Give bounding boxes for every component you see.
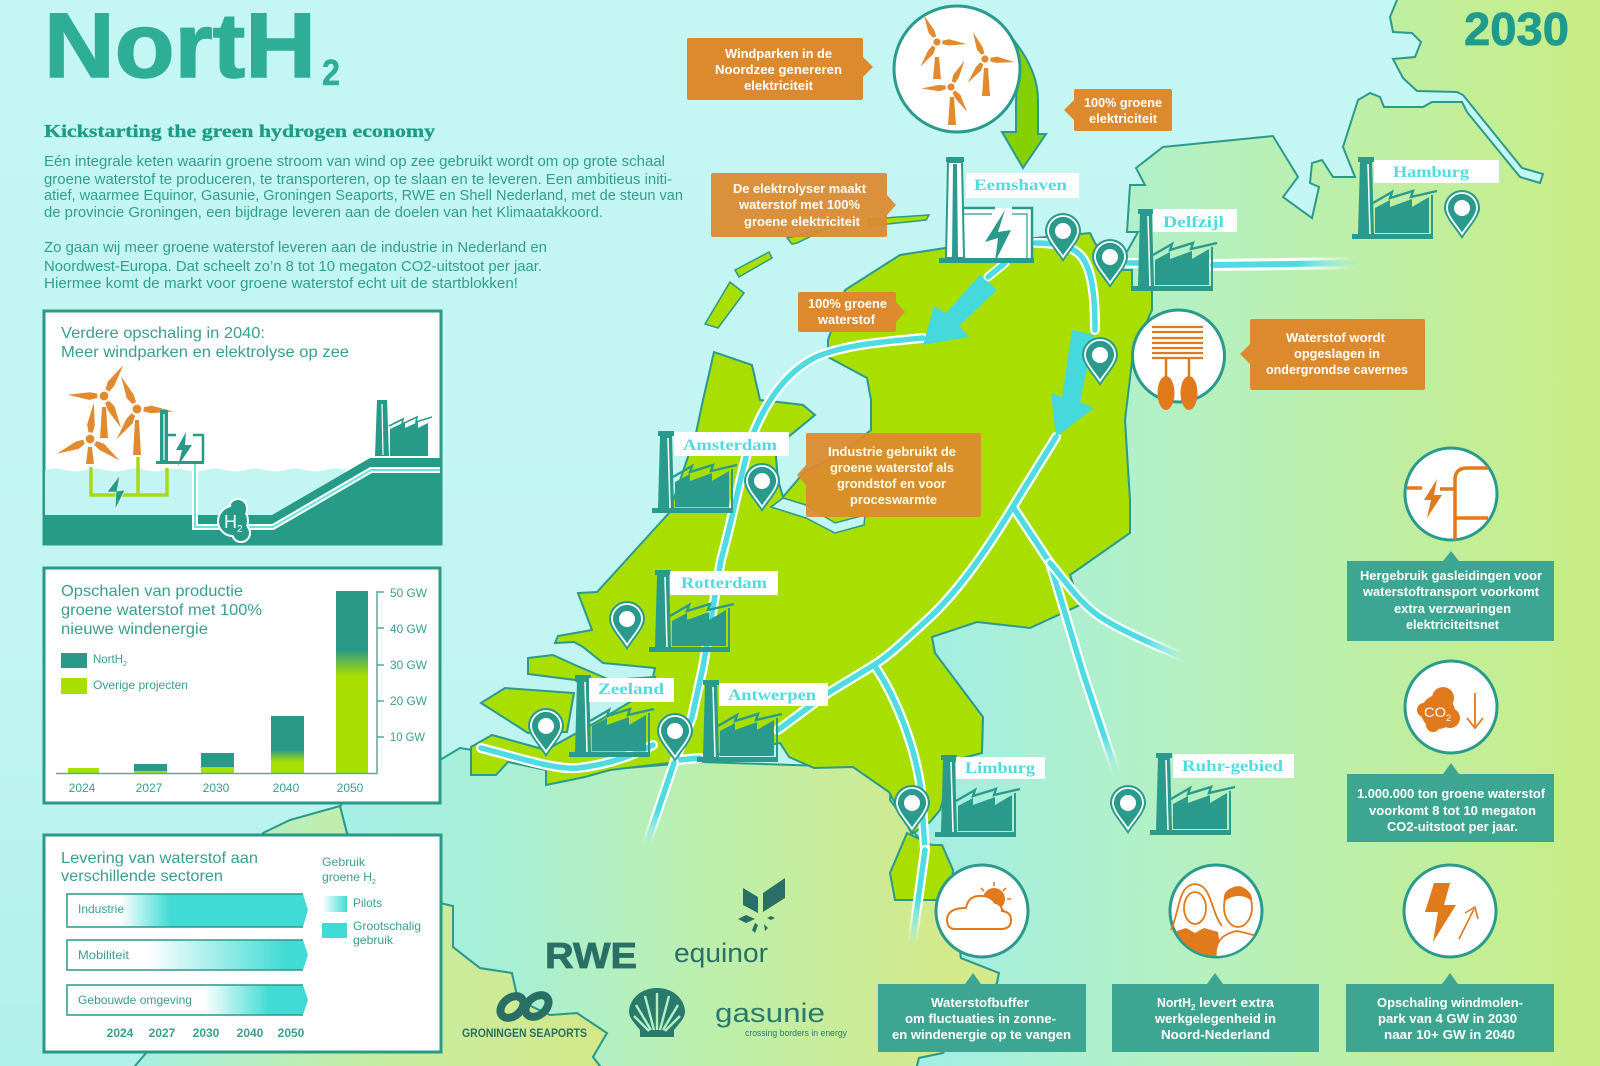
callout: cavernes: Waterstof wordt: [1286, 330, 1386, 345]
panel heading: Meer windparken en elektrolyse op zee: [61, 344, 349, 361]
logo: RWE: RWE: [545, 935, 637, 976]
icon: big wind turbine circle: [894, 3, 1020, 132]
callout: industrie: groene waterstof als: [830, 460, 954, 475]
icon: people: [1165, 865, 1264, 960]
info box: werkgelegenheid: Noord-Nederland: [1161, 1027, 1270, 1042]
panel heading: Levering van waterstof aan: [61, 850, 258, 867]
bar chart: 40 GW: [390, 622, 428, 636]
callout: groene waterstof: 100% groene: [808, 296, 887, 311]
legend: NortH: [93, 652, 123, 666]
callout: cavernes: ondergrondse cavernes: [1266, 362, 1408, 377]
icon: gas pipeline reuse: [1405, 448, 1497, 540]
callout: groene elektriciteit: 100% groene: [1084, 95, 1162, 110]
factory: Eemshaven electrolyser: [939, 157, 1079, 263]
info box: werkgelegenheid: 2: [1191, 1003, 1196, 1012]
logo: Groningen Seaports: [462, 991, 587, 1040]
info box: gasleidingen: extra verzwaringen: [1394, 601, 1511, 616]
sector bars: Industrie: [78, 902, 124, 916]
title: 2: [322, 52, 340, 93]
pipeline: [195, 463, 440, 527]
logo: Gasunie: crossing borders in energy: [745, 1028, 847, 1038]
logo: equinor: [674, 878, 785, 968]
info box: werkgelegenheid: NortH: [1157, 995, 1191, 1010]
Limburg tail: [890, 833, 953, 900]
H2 molecule: H: [224, 512, 237, 532]
factory: Hamburg: [1352, 157, 1499, 239]
H2 molecule: [218, 499, 250, 542]
info box: gasleidingen: Hergebruik gasleidingen voor: [1360, 568, 1542, 583]
panel heading: nieuwe windenergie: [61, 621, 208, 638]
land: Germany and Denmark: [890, 0, 1600, 1066]
arrow: hydrogen south: [1051, 330, 1094, 437]
legend: gebruik: [353, 933, 394, 947]
bar chart: 50 GW: [390, 586, 428, 600]
icon: bolt with arrow: [1404, 865, 1496, 957]
info box: opschaling windmolenpark: [1346, 973, 1554, 1052]
logo: Shell: [629, 988, 685, 1037]
legend: 2: [123, 661, 127, 668]
H2 molecule: 2: [237, 524, 243, 535]
callout: elektrolyser: waterstof met 100%: [738, 197, 860, 212]
panel heading: [61, 850, 258, 885]
factory: Zeeland: [569, 675, 674, 757]
turbines: [55, 348, 177, 464]
hydrogen pipelines: [481, 243, 1357, 945]
logo: Groningen Seaports: GRONINGEN SEAPORTS: [462, 1026, 587, 1040]
factory: Rotterdam: Rotterdam: [681, 575, 768, 592]
year 2030: 2030: [1464, 3, 1569, 55]
timeline years: 2050: [278, 1026, 305, 1040]
icon: CO2 reduction: [1405, 661, 1497, 753]
callout: industrie: proceswarmte: [850, 492, 937, 507]
intro text: Eén integrale keten waarin groene stroom van wind op zee gebruikt wordt om op grote schaal: [44, 154, 665, 170]
callout: cavernes: opgeslagen in: [1294, 346, 1380, 361]
factory: Limburg: [935, 755, 1045, 837]
logo: Gasunie: gasunie: [715, 998, 825, 1028]
intro text: atief, waarmee Equinor, Gasunie, Groningen Seaports, RWE en Shell Nederland, met de steun van: [44, 188, 683, 204]
timeline years: 2024: [107, 1026, 134, 1040]
callout: groene waterstof: [798, 292, 905, 332]
info box: CO2: voorkomt 8 tot 10 megaton: [1369, 803, 1536, 818]
icon: bolt: [107, 475, 125, 510]
bar chart: [56, 586, 428, 795]
sector bars: Gebouwde omgeving: [78, 993, 192, 1007]
info box: opschaling windmolenpark: park van 4 GW in 2030: [1378, 1011, 1517, 1026]
info box: waterstofbuffer: [878, 973, 1086, 1052]
info box: werkgelegenheid: werkgelegenheid in: [1154, 1011, 1276, 1026]
factory: Delfzijl: Delfzijl: [1163, 214, 1225, 231]
info box: opschaling windmolenpark: Opschaling windmolen-: [1377, 995, 1523, 1010]
logo: Gasunie: [715, 998, 847, 1038]
timeline years: 2040: [237, 1026, 264, 1040]
land: France: [135, 806, 607, 1066]
intro text: Hiermee komt de markt voor groene waterstof echt uit de startblokken!: [44, 276, 518, 292]
callout: industrie: grondstof en voor: [837, 476, 946, 491]
legend: [322, 855, 421, 947]
timeline years: 2030: [193, 1026, 220, 1040]
intro text: de provincie Groningen, een bijdrage leveren aan de doelen van het Klimaatakkoord.: [44, 205, 603, 221]
water: [45, 468, 345, 516]
Wadden islands: [705, 215, 929, 328]
sector bars: Mobiliteit: [78, 948, 130, 962]
legend: groene H: [322, 870, 372, 884]
logo: equinor: equinor: [674, 938, 768, 968]
factory: Zeeland: Zeeland: [598, 681, 664, 698]
seabed and land: [45, 458, 440, 543]
callout: groene waterstof: waterstof: [817, 312, 876, 327]
panel heading: Verdere opschaling in 2040:: [61, 325, 265, 342]
info box: waterstofbuffer: en windenergie op te vangen: [892, 1027, 1071, 1042]
factory: Amsterdam: [652, 431, 789, 513]
panel heading: [61, 325, 349, 361]
bar chart: 2024: [69, 781, 96, 795]
factory: Eemshaven electrolyser: Eemshaven: [974, 177, 1067, 194]
factory: Hamburg: Hamburg: [1393, 164, 1469, 181]
icon: CO2 reduction: CO: [1424, 704, 1446, 720]
info box: CO2: [1347, 763, 1554, 842]
cables: [91, 457, 167, 495]
timeline years: 2027: [149, 1026, 176, 1040]
panel: levering sectoren: [44, 835, 441, 1052]
info box: gasleidingen: [1347, 551, 1554, 641]
factory: Rotterdam: [649, 570, 778, 652]
timeline years: [107, 1026, 305, 1040]
callout: elektrolyser: groene elektriciteit: [744, 214, 861, 229]
intro text: groene waterstof te produceren, te transporteren, op te slaan en te leveren. Een ambitieus initi-: [44, 172, 672, 188]
factory: Antwerpen: [697, 680, 828, 762]
callout: industrie: Industrie gebruikt de: [828, 444, 956, 459]
legend: [61, 652, 188, 694]
callout: groene elektriciteit: elektriciteit: [1089, 111, 1158, 126]
icon: CO2 reduction: 2: [1446, 713, 1451, 723]
info box: waterstofbuffer: Waterstofbuffer: [931, 995, 1029, 1010]
location pins: [528, 190, 1480, 834]
intro text: Zo gaan wij meer groene waterstof leveren aan de industrie in Nederland en: [44, 240, 547, 256]
electrolyser platform: [156, 410, 204, 466]
factory: Limburg: Limburg: [965, 760, 1035, 777]
bar chart: 20 GW: [390, 694, 428, 708]
panel: opschaling 2040: [44, 311, 441, 544]
callout: windparken: elektriciteit: [744, 78, 814, 93]
info box: waterstofbuffer: om fluctuaties in zonne-: [905, 1011, 1056, 1026]
intro text: Noordwest-Europa. Dat scheelt zo’n 8 tot 10 megaton CO2-uitstoot per jaar.: [44, 259, 542, 275]
legend: 2: [372, 879, 376, 886]
sector bars: [67, 894, 308, 1015]
bar chart: 2027: [136, 781, 163, 795]
bar chart: 10 GW: [390, 730, 426, 744]
factory: Ruhr-gebied: [1150, 753, 1294, 835]
callout: windparken: Windparken in de: [725, 46, 832, 61]
callout: windparken: Noordzee genereren: [715, 62, 842, 77]
legend: Grootschalig: [353, 919, 421, 933]
callout: industrie: [797, 433, 981, 517]
panel heading: verschillende sectoren: [61, 868, 223, 885]
panel heading: groene waterstof met 100%: [61, 602, 262, 619]
info box: werkgelegenheid: [1112, 973, 1319, 1052]
legend: Gebruik: [322, 855, 366, 869]
factory: Antwerpen: Antwerpen: [728, 687, 816, 704]
callout: cavernes: [1240, 319, 1425, 390]
panel heading: [61, 583, 262, 638]
icon: underground caverns: [1132, 310, 1224, 410]
bar chart: 30 GW: [390, 658, 428, 672]
info box: CO2: CO2-uitstoot per jaar.: [1387, 819, 1518, 834]
panel heading: Opschalen van productie: [61, 583, 243, 600]
info box: gasleidingen: waterstoftransport voorkomt: [1362, 584, 1540, 599]
land: Belgium: [340, 748, 999, 1066]
callout: elektrolyser: De elektrolyser maakt: [733, 181, 867, 196]
arrow: hydrogen west: [923, 275, 997, 345]
legend: Pilots: [353, 896, 382, 910]
callout: groene elektriciteit: [1064, 89, 1172, 131]
factory: Ruhr-gebied: Ruhr-gebied: [1182, 758, 1283, 775]
bar chart: 2040: [273, 781, 300, 795]
intro text: [44, 154, 683, 292]
info box: werkgelegenheid: levert extra: [1199, 995, 1275, 1010]
panel: opschalen productie: [44, 568, 440, 803]
arrow: green electricity: [1002, 38, 1046, 168]
legend: Overige projecten: [93, 678, 188, 692]
factory: [375, 400, 432, 456]
subtitle: Kickstarting the green hydrogen economy: [44, 121, 435, 141]
factory: Amsterdam: Amsterdam: [683, 437, 778, 454]
info box: CO2: 1.000.000 ton groene waterstof: [1357, 786, 1546, 801]
bar chart: 2050: [337, 781, 364, 795]
factory: Delfzijl: [1132, 209, 1237, 291]
callout: elektrolyser: [711, 173, 896, 237]
info box: gasleidingen: elektriciteitsnet: [1406, 617, 1500, 632]
Goeree island: [528, 655, 655, 690]
bar chart: 2030: [203, 781, 230, 795]
water ring near Amsterdam: [771, 498, 865, 533]
info box: opschaling windmolenpark: naar 10+ GW in 2040: [1384, 1027, 1515, 1042]
Zeeland island: [481, 688, 574, 733]
callout: windparken: [687, 38, 873, 100]
land: Netherlands: [471, 215, 1152, 900]
icon: cloud and sun: [936, 865, 1028, 957]
